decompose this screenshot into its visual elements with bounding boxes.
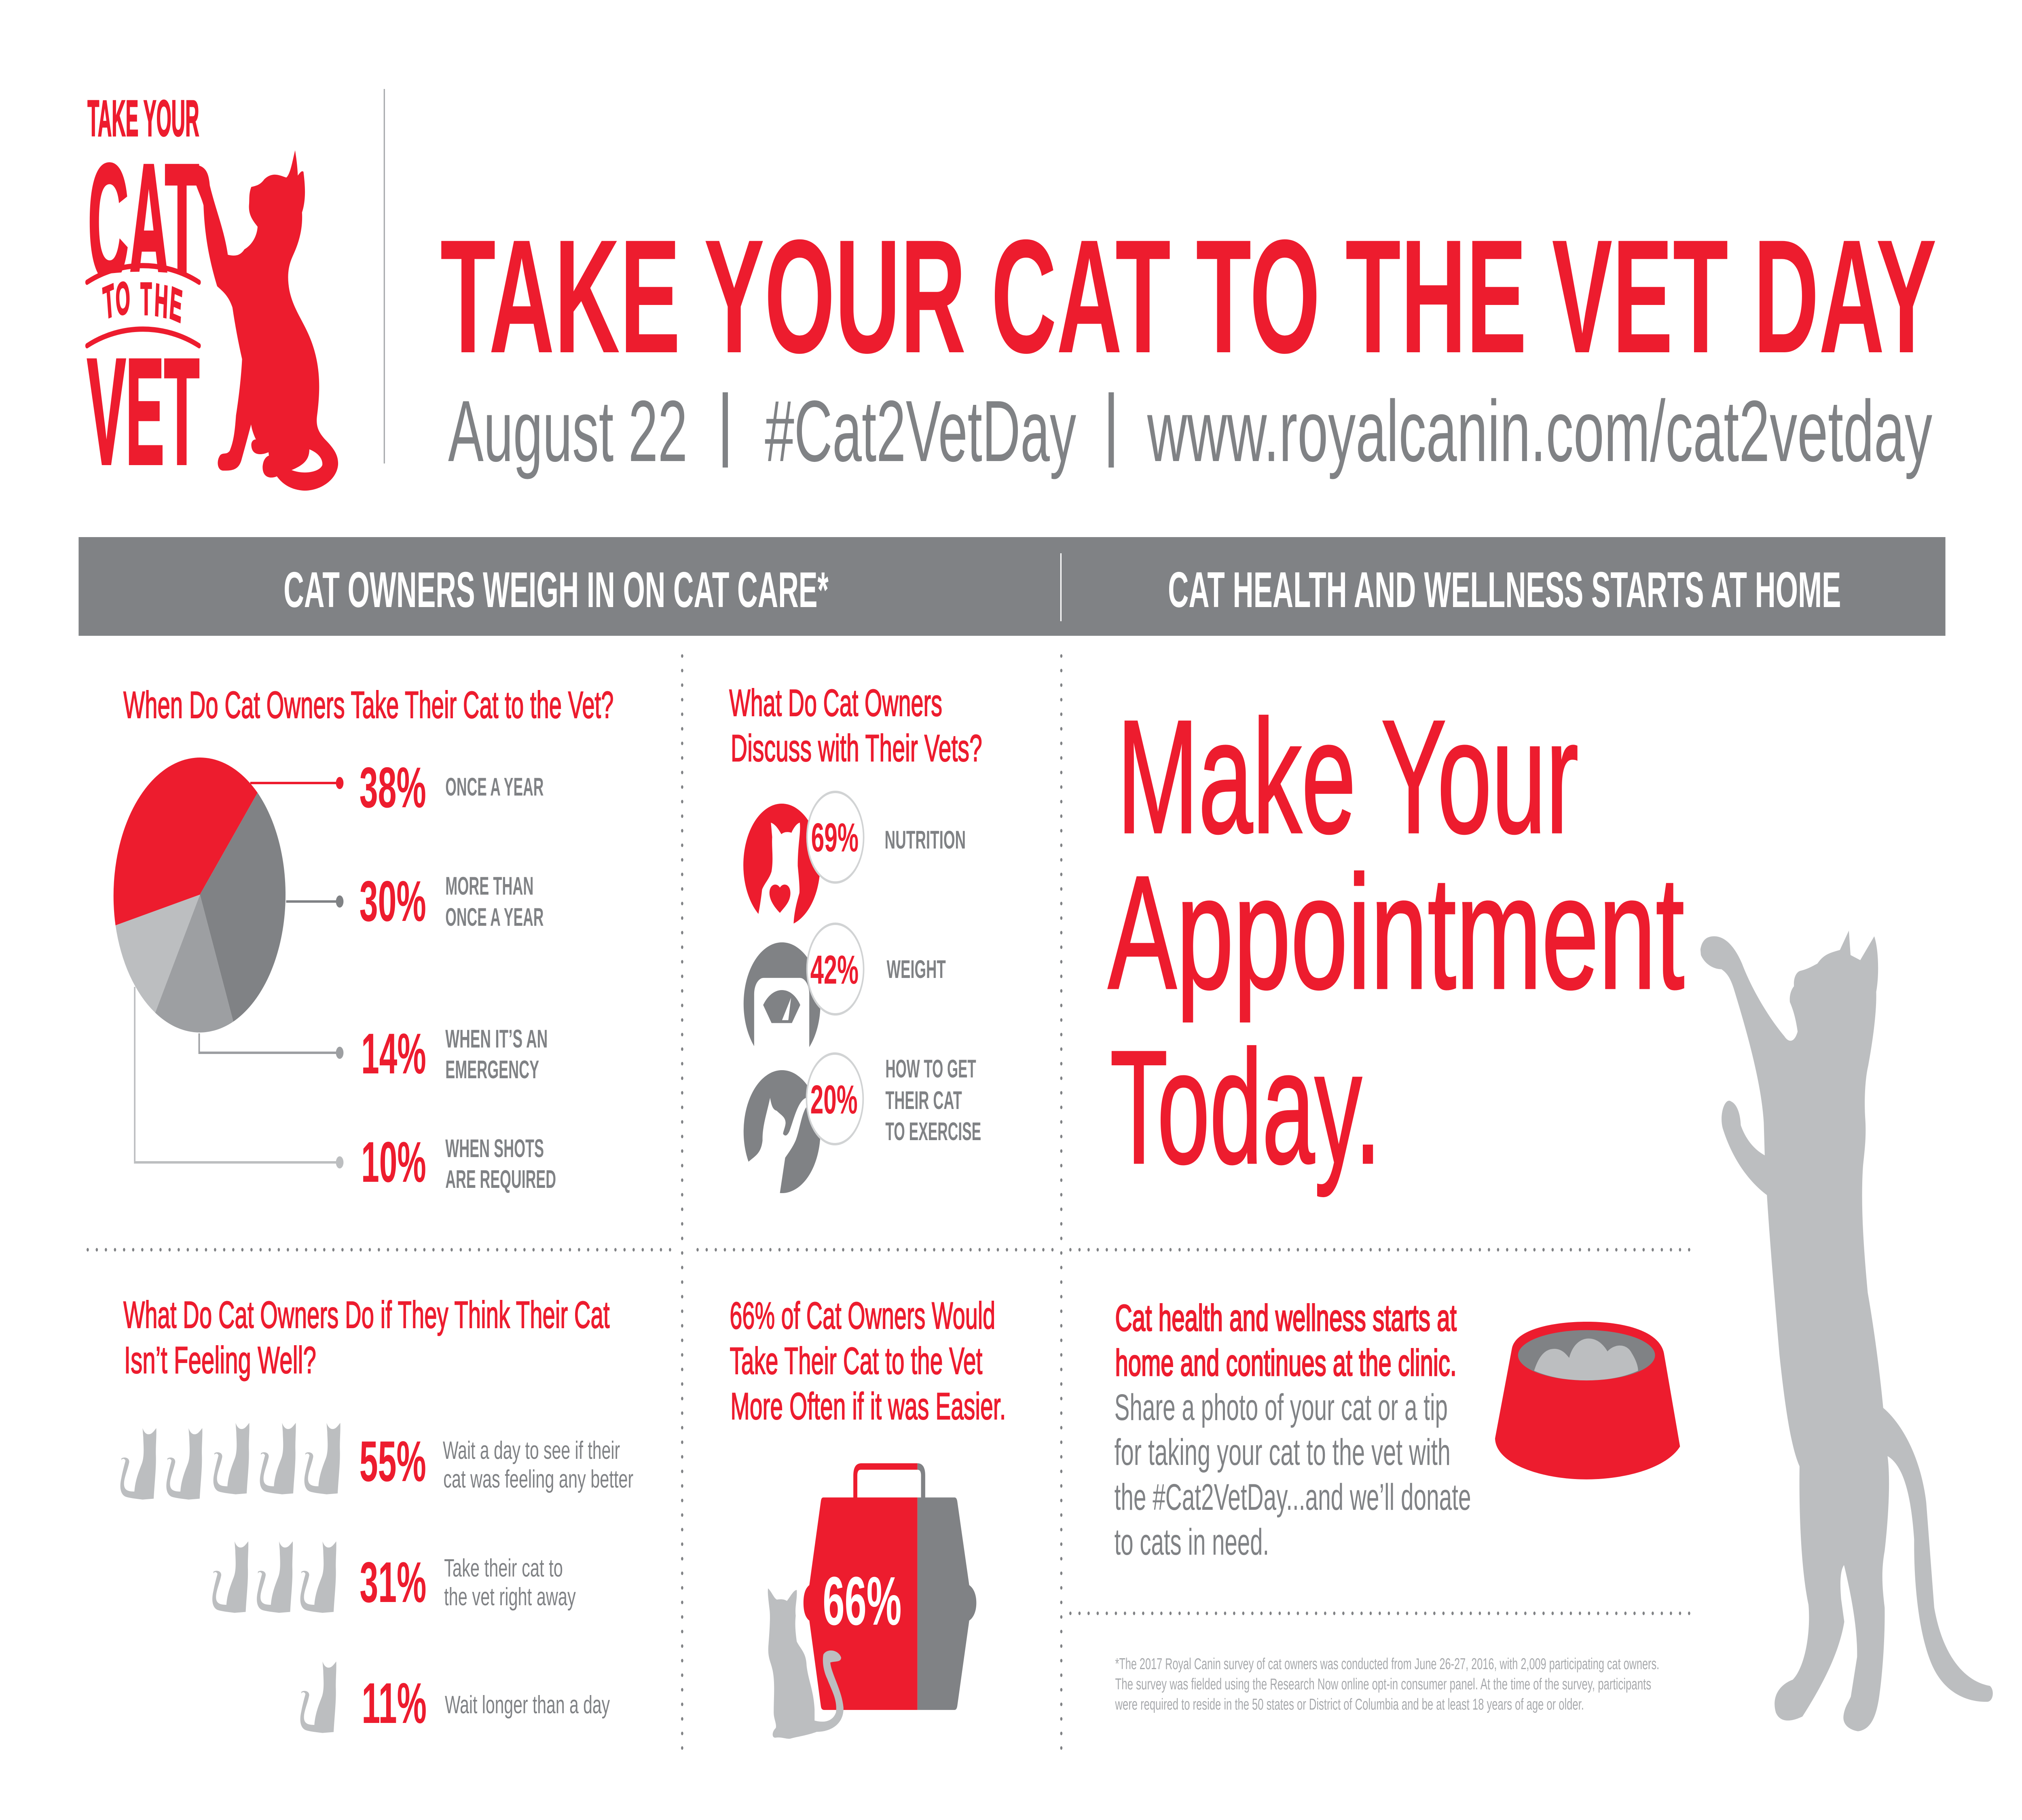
badge: 69 percent nutrition: [807, 792, 966, 882]
badge: 42 percent weight: [807, 924, 946, 1014]
footnote: The survey was fielded using the Research Now online opt-in consumer panel. At the time of the survey, participants: [1115, 1675, 1651, 1693]
panel: what owners do if cat is unwell: Isn’t Feeling Well?: [124, 1339, 316, 1381]
stat: 38 percent once a year: [360, 756, 544, 820]
panel: what owners discuss with vets: [729, 681, 982, 1205]
row: 55 percent wait a day: 55%: [360, 1430, 426, 1494]
badge: 69 percent nutrition: 69%: [811, 815, 859, 860]
heading: What Do Cat Owners Do if They Think Their Cat: [123, 1293, 610, 1336]
panel: when do owners take cat to the vet: [114, 684, 613, 1194]
stat: 10 percent shots: 10%: [361, 1130, 426, 1194]
subtitle: date, hashtag and URL: #Cat2VetDay: [765, 383, 1077, 480]
subtitle: date, hashtag and URL: [448, 383, 1932, 480]
subtitle: date, hashtag and URL: August 22: [448, 383, 687, 480]
text block: share a photo: the #Cat2VetDay...and we’ll donate: [1115, 1477, 1471, 1518]
stat: 10 percent shots: ARE REQUIRED: [445, 1165, 556, 1194]
carrier percentage: 66%: [823, 1563, 901, 1640]
icon: food bowl: [1495, 1322, 1680, 1479]
text block: share a photo: [1115, 1297, 1471, 1563]
badge: 20 percent exercise: 20%: [810, 1077, 858, 1122]
badge: 69 percent nutrition: NUTRITION: [885, 826, 966, 854]
logo wordmark: CAT: [88, 130, 199, 315]
stat: 30 percent more than once a year: MORE THAN: [445, 872, 533, 900]
badge: 42 percent weight: WEIGHT: [886, 955, 946, 984]
stat: 30 percent more than once a year: [360, 870, 544, 933]
row: 11 percent wait longer: [300, 1661, 610, 1735]
icon: exercising cat: [737, 1070, 821, 1205]
icon: cat with heart: [743, 804, 820, 942]
footnote: were required to reside in the 50 states or District of Columbia and be at least 18 years of age or older.: [1115, 1695, 1584, 1713]
pie chart: [114, 758, 286, 1033]
call to action: [1108, 687, 1685, 1198]
footnote: [1115, 1655, 1659, 1713]
badge: 20 percent exercise: HOW TO GET: [885, 1055, 976, 1083]
stat: 10 percent shots: WHEN SHOTS: [445, 1134, 544, 1163]
header: health starts at home: CAT HEALTH AND WELLNESS STARTS AT HOME: [1168, 561, 1841, 618]
logo wordmark: TO THE: [102, 271, 184, 333]
subtitle: date, hashtag and URL: www.royalcanin.com/cat2vetday: [1147, 383, 1932, 480]
stat: 38 percent once a year: ONCE A YEAR: [445, 773, 544, 801]
call to action: Make Your: [1117, 687, 1578, 867]
panel: carrier statistic: Take Their Cat to the Vet: [730, 1340, 983, 1382]
row: 31 percent right away: [212, 1541, 576, 1615]
row: 31 percent right away: Take their cat to: [444, 1554, 563, 1582]
header: cat owners weigh in: CAT OWNERS WEIGH IN ON CAT CARE*: [283, 561, 829, 618]
row: 55 percent wait a day: [121, 1423, 633, 1500]
heading: When Do Cat Owners Take Their Cat to the Vet?: [123, 684, 614, 726]
row: 11 percent wait longer: 11%: [362, 1672, 427, 1735]
text block: share a photo: for taking your cat to the vet with: [1115, 1432, 1451, 1473]
text block: share a photo: Cat health and wellness starts at: [1115, 1297, 1457, 1339]
row: 31 percent right away: 31%: [360, 1551, 426, 1615]
icon: weighing scale: [744, 942, 821, 1086]
logo wordmark: TAKE YOUR: [87, 90, 199, 147]
row: 31 percent right away: the vet right away: [444, 1583, 576, 1610]
heading: What Do Cat Owners: [729, 681, 942, 724]
stat: 30 percent more than once a year: 30%: [360, 870, 426, 933]
icon: standing grey cat: [1701, 931, 1993, 1731]
badge: 42 percent weight: 42%: [810, 947, 859, 993]
panel: carrier statistic: [730, 1294, 1006, 1739]
footnote: *The 2017 Royal Canin survey of cat owners was conducted from June 26-27, 2016, with 2,009 participating cat owners.: [1115, 1655, 1659, 1672]
stat: 14 percent emergency: WHEN IT’S AN: [445, 1025, 548, 1053]
logo wordmark: [76, 90, 210, 495]
section header bar: [78, 537, 1946, 636]
badge: 20 percent exercise: THEIR CAT: [885, 1086, 962, 1115]
stat: 30 percent more than once a year: ONCE A YEAR: [445, 903, 544, 931]
icon: sitting cat: [768, 1588, 844, 1739]
leader lines: [135, 777, 343, 1168]
badge: 20 percent exercise: TO EXERCISE: [885, 1117, 981, 1146]
panel: carrier statistic: More Often if it was Easier.: [730, 1385, 1006, 1427]
stat: 14 percent emergency: [361, 1022, 548, 1086]
logo: Take Your Cat to the Vet: [76, 90, 338, 495]
logo: red cat silhouette: [194, 150, 338, 491]
stat: 14 percent emergency: 14%: [361, 1022, 426, 1086]
text block: share a photo: home and continues at the clinic.: [1115, 1342, 1457, 1384]
row: 11 percent wait longer: Wait longer than a day: [445, 1691, 610, 1718]
badge: 20 percent exercise: [806, 1054, 981, 1146]
stat: 14 percent emergency: EMERGENCY: [445, 1056, 539, 1084]
panel: what owners discuss with vets: Discuss with Their Vets?: [731, 727, 982, 769]
row: 55 percent wait a day: cat was feeling any better: [443, 1465, 633, 1493]
call to action: Today.: [1110, 1018, 1381, 1198]
text block: share a photo: Share a photo of your cat or a tip: [1115, 1387, 1448, 1428]
logo wordmark: VET: [87, 327, 199, 495]
row: 55 percent wait a day: Wait a day to see if their: [443, 1436, 620, 1464]
stat: 10 percent shots: [361, 1130, 556, 1194]
text block: share a photo: to cats in need.: [1115, 1522, 1269, 1563]
panel: what owners do if cat is unwell: [121, 1293, 633, 1735]
icon: pet carrier: [804, 1463, 976, 1710]
call to action: Appointment: [1108, 843, 1685, 1023]
stat: 38 percent once a year: 38%: [360, 756, 426, 820]
heading: 66% of Cat Owners Would: [730, 1294, 995, 1337]
